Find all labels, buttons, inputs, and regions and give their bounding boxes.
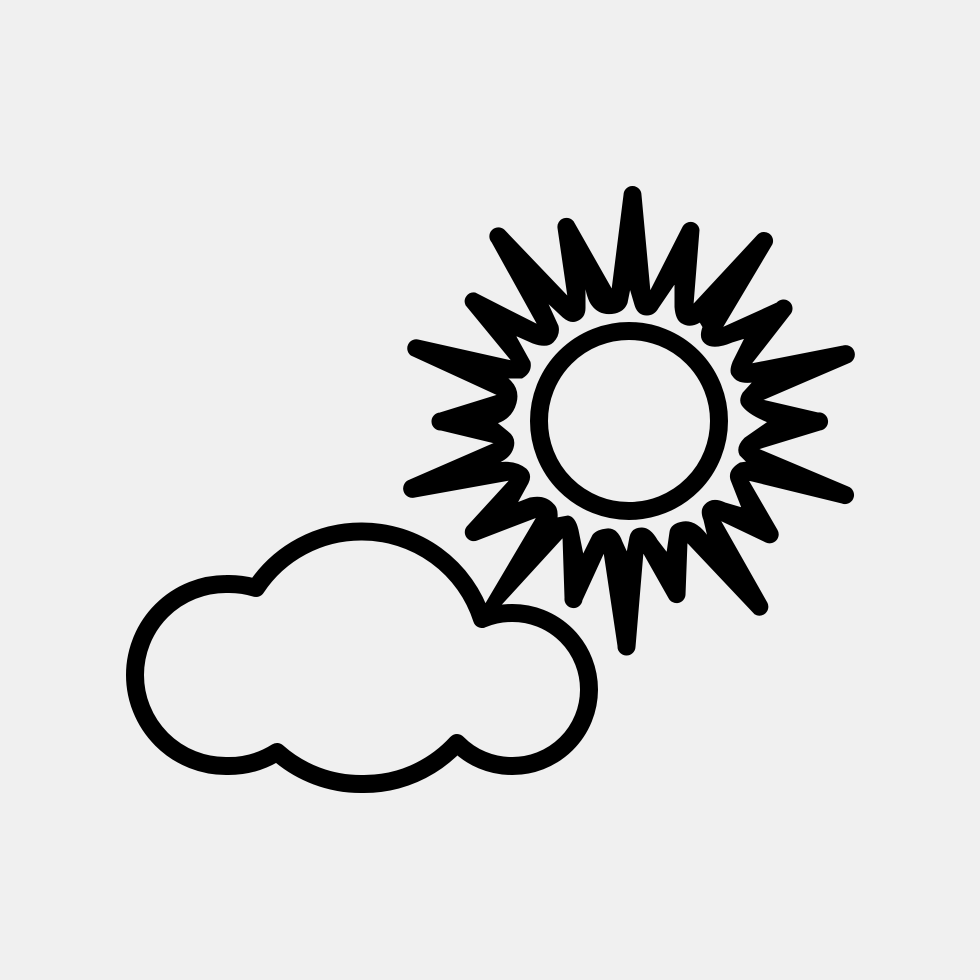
icon: sun (404, 186, 854, 655)
icon: cloud (135, 531, 589, 784)
sun rays (404, 186, 854, 655)
sun disc (539, 331, 719, 511)
